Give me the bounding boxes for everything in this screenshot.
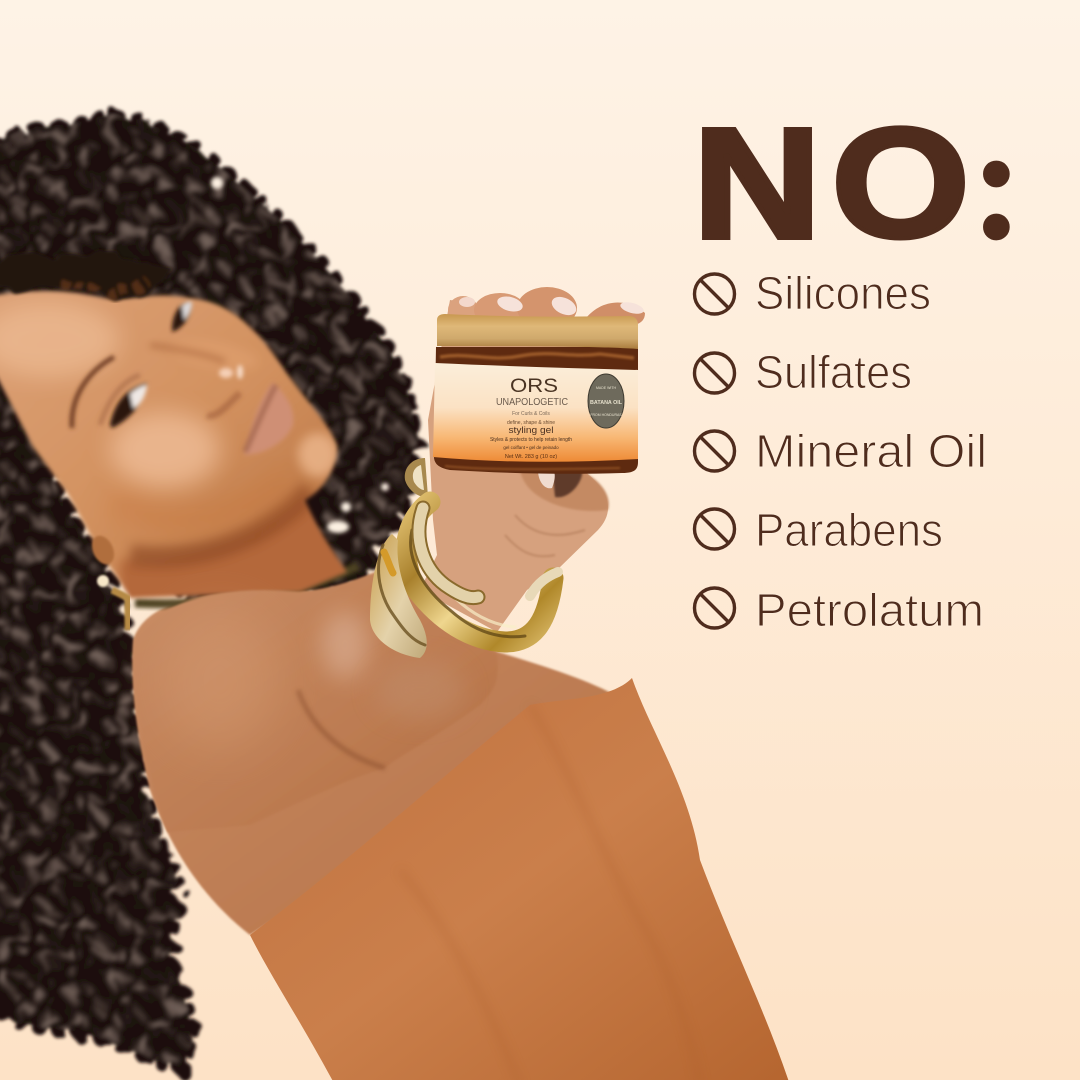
jar label xyxy=(433,363,638,462)
heading: NO:: N xyxy=(693,96,821,271)
hand shading xyxy=(505,468,609,556)
jar lid xyxy=(437,314,638,349)
dress strap xyxy=(135,566,358,604)
torso skin xyxy=(132,590,620,935)
batana oil badge xyxy=(588,374,624,428)
item: Parabens: Parabens xyxy=(755,504,943,556)
earring xyxy=(88,532,128,630)
list: excluded ingredients xyxy=(694,267,987,636)
hair: upper mass xyxy=(0,118,416,608)
product jar xyxy=(433,314,638,474)
model photo illustration xyxy=(0,118,790,1080)
heading: NO: xyxy=(693,91,1024,274)
face and neck xyxy=(0,280,360,610)
product jar: For Curls & Coils xyxy=(512,411,550,417)
arm shading xyxy=(160,610,465,768)
small ring xyxy=(405,458,428,497)
face highlights xyxy=(0,302,120,378)
heading: NO:: : xyxy=(970,91,1024,274)
wide bangle xyxy=(406,502,553,642)
product name: UNAPOLOGETIC xyxy=(496,397,568,408)
item: Silicones: Silicones xyxy=(755,267,931,319)
item: Mineral Oil: Mineral Oil xyxy=(755,425,987,477)
hair: highlights xyxy=(211,177,389,533)
jar gel body xyxy=(434,347,638,474)
arm xyxy=(134,572,498,832)
item: Sulfates: Sulfates xyxy=(755,346,912,398)
product jar: styling gel xyxy=(508,425,554,436)
item: Petrolatum: Petrolatum xyxy=(755,584,984,636)
fingertips xyxy=(448,287,645,329)
gold bangles xyxy=(370,458,558,658)
hair: lower mass xyxy=(0,370,195,1068)
dress xyxy=(250,678,790,1080)
batana oil badge: BATANA OIL xyxy=(590,400,622,406)
product jar: Net Wt. 283 g (10 oz) xyxy=(505,454,557,460)
heading: NO:: O xyxy=(831,95,970,271)
right bangle tip xyxy=(530,572,558,596)
hairline fringe xyxy=(0,250,170,298)
product jar: Styles & protects to help retain length xyxy=(490,437,572,443)
lips and nose xyxy=(207,365,293,455)
outer flared piece xyxy=(370,534,427,658)
eyes and brows xyxy=(72,302,192,428)
hand and wrist xyxy=(420,300,635,632)
product jar: define, shape & shine xyxy=(507,420,555,426)
inner bangle xyxy=(419,508,478,598)
brand logo: ORS xyxy=(510,376,558,397)
batana oil badge: MADE WITH xyxy=(596,386,616,390)
neck shading xyxy=(116,505,342,600)
item: Sulfates xyxy=(694,346,912,398)
batana oil badge: FROM HONDURAS xyxy=(590,413,622,417)
gel highlights xyxy=(440,354,634,469)
product jar: gel coiffant • gel de peinado xyxy=(503,445,559,450)
